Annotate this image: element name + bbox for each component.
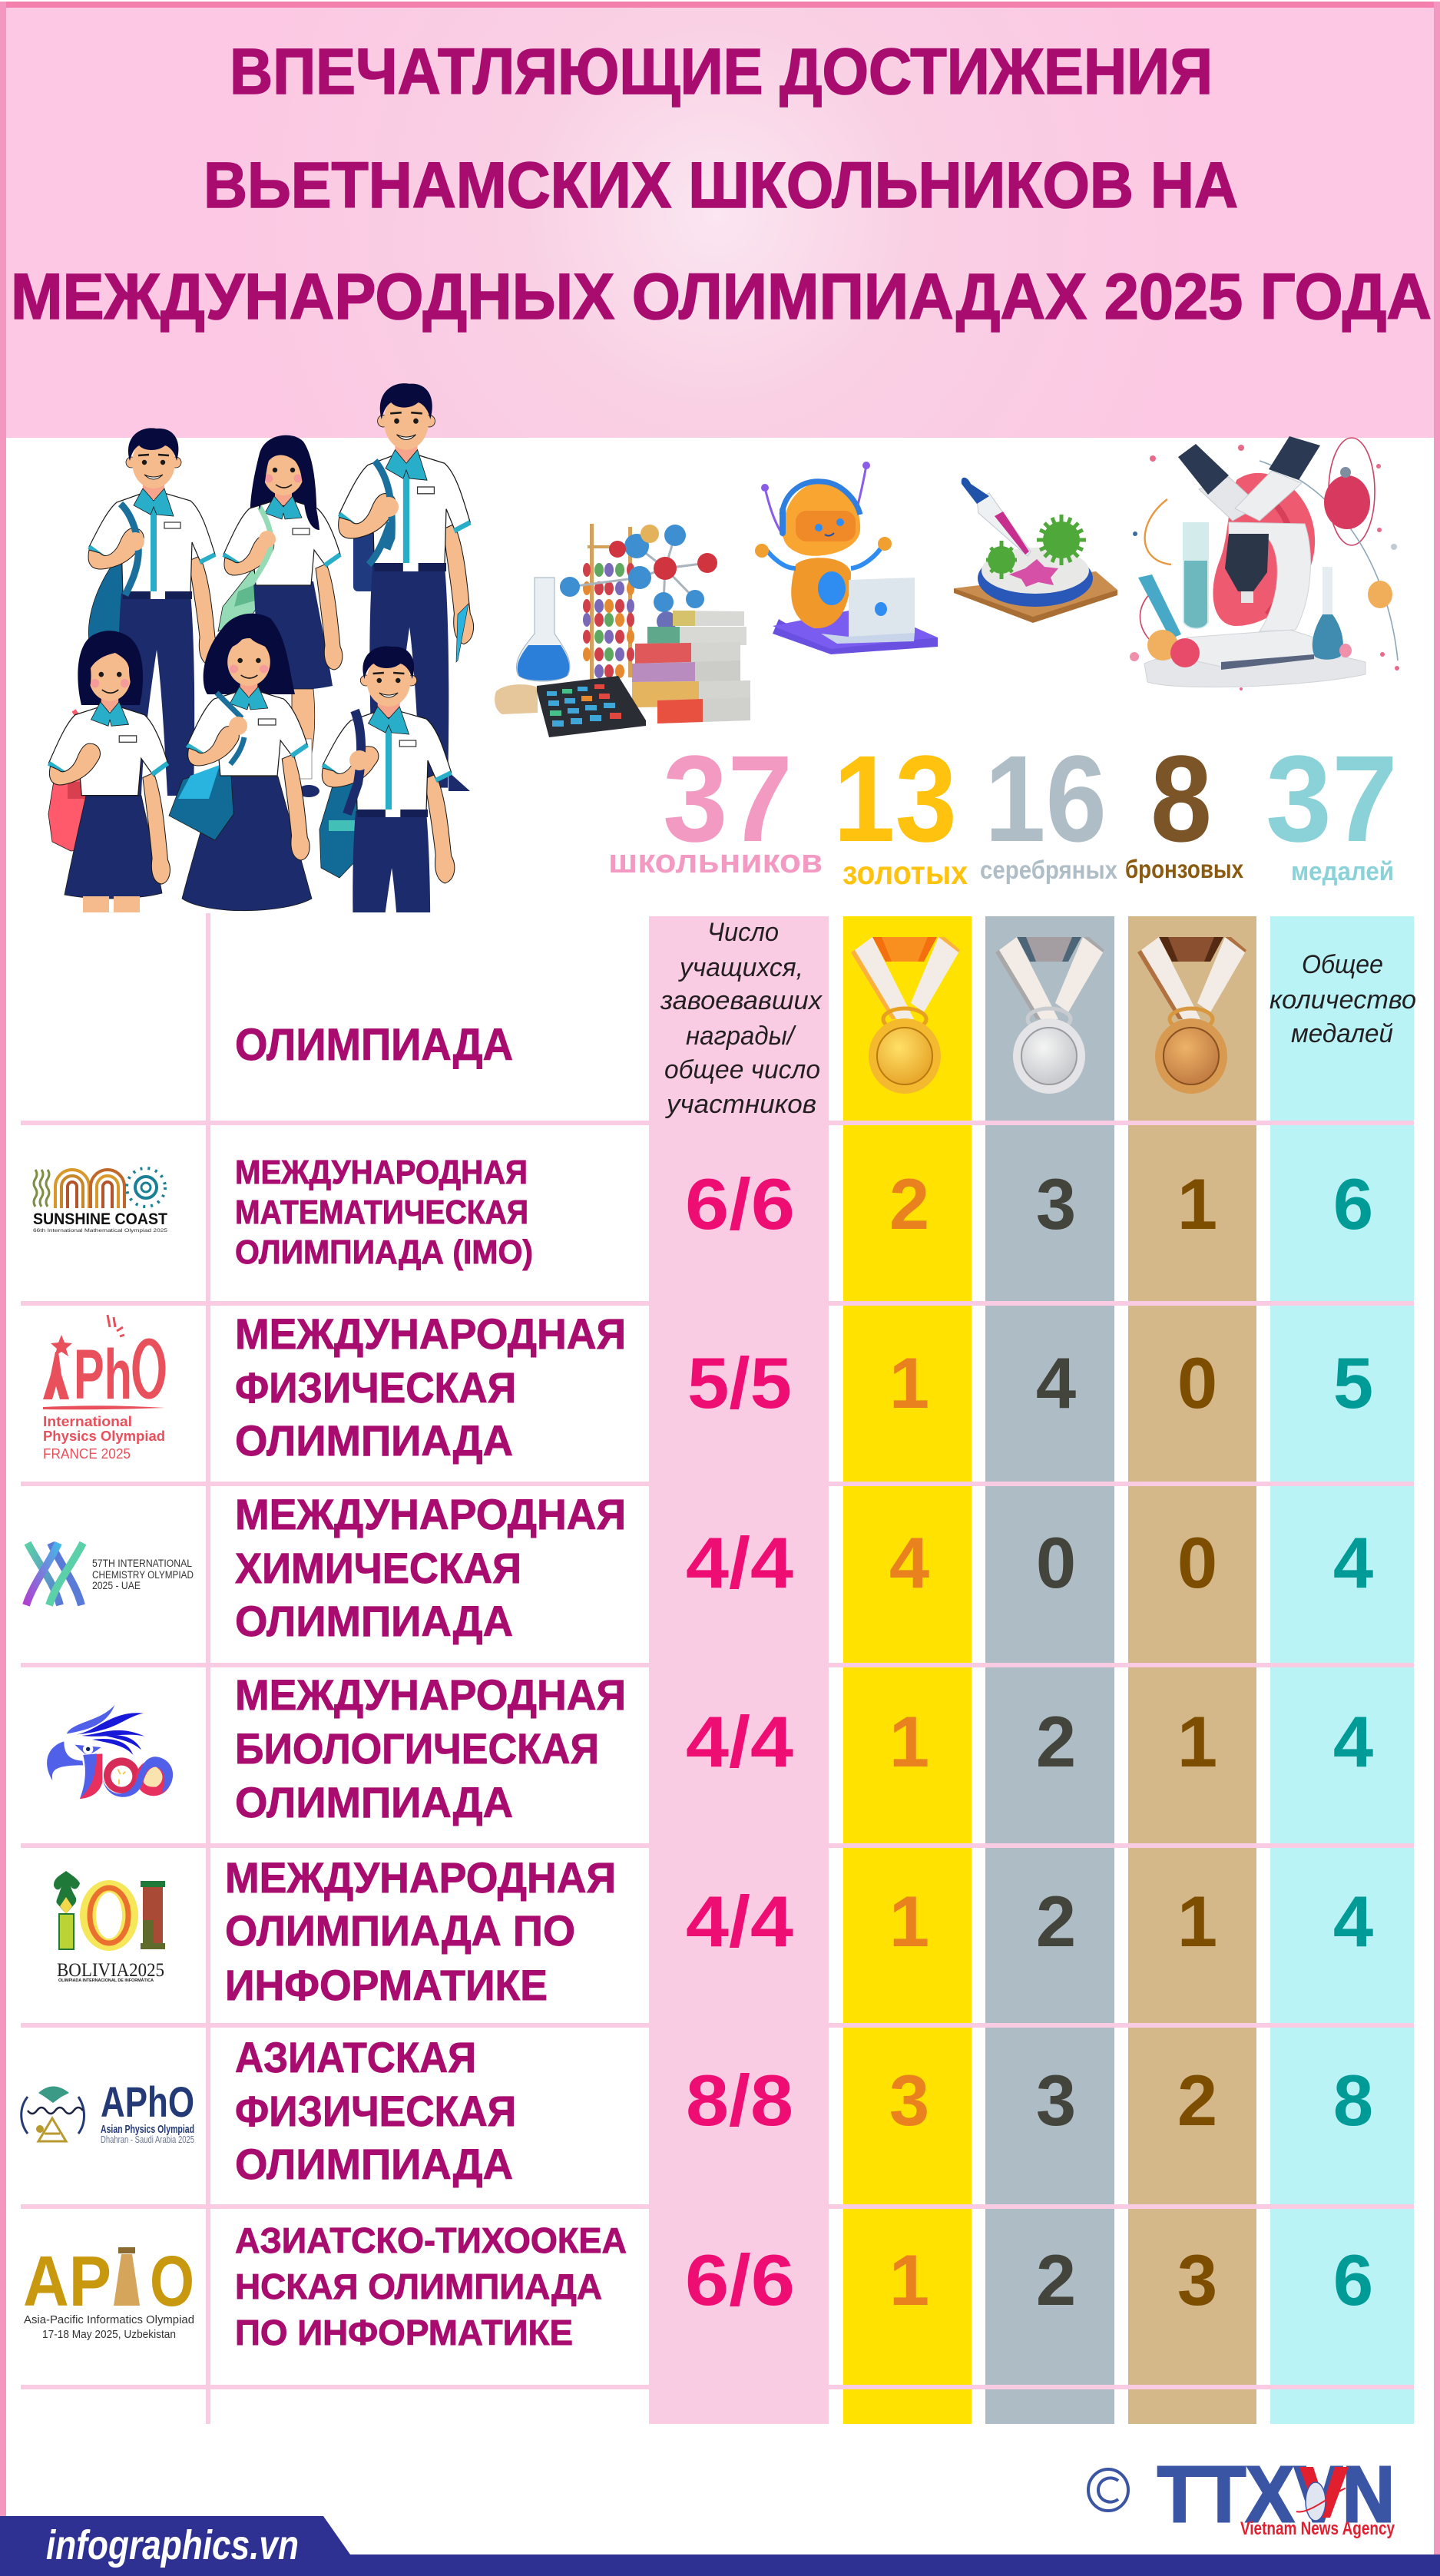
logo: copyright and TTXVN Vietnam News Agency: Vietnam News Agency bbox=[1240, 2518, 1395, 2539]
logo: IChO UAE 2025: CHEMISTRY OLYMPIAD bbox=[92, 1569, 194, 1581]
values bbox=[686, 1881, 1373, 1962]
olympiad name bbox=[235, 2033, 516, 2188]
tall tube bbox=[1183, 522, 1209, 629]
olympiad name: ОЛИМПИАДА bbox=[235, 1597, 513, 1645]
values bbox=[685, 1164, 1373, 1244]
olympiad name: НСКАЯ ОЛИМПИАДА bbox=[235, 2266, 602, 2306]
illustration: robot with laptop bbox=[755, 462, 938, 654]
stat: silver medals: серебряных bbox=[980, 856, 1118, 884]
values bbox=[686, 1522, 1373, 1603]
header: awarded students over participants: завоевавших bbox=[660, 986, 823, 1015]
title: МЕЖДУНАРОДНЫХ ОЛИМПИАДАХ 2025 ГОДА bbox=[11, 260, 1432, 333]
logo: IOI Bolivia 2025: OLIMPIADA INTERNACIONAL DE INFORMÁTICA bbox=[58, 1978, 154, 1983]
header: awarded students over participants: награды/ bbox=[686, 1021, 796, 1051]
olympiad name: ИНФОРМАТИКЕ bbox=[225, 1961, 548, 2009]
row 2: physics bbox=[43, 1310, 1373, 1465]
row 6: Asian physics bbox=[22, 2033, 1373, 2188]
logo: IMO Sunshine Coast: 66th International Mathematical Olympiad 2025 bbox=[33, 1228, 167, 1233]
stat: bronze medals bbox=[1125, 730, 1244, 883]
student: boy back right bbox=[339, 383, 474, 791]
values: 2 bbox=[1036, 1881, 1076, 1962]
olympiad name bbox=[235, 2220, 627, 2353]
copyright symbol bbox=[1088, 2469, 1128, 2511]
microscope arm bbox=[1229, 522, 1310, 631]
values: 4/4 bbox=[686, 1881, 793, 1962]
calculator bbox=[537, 676, 646, 737]
title band bbox=[0, 2, 1440, 438]
olympiad name bbox=[235, 1310, 626, 1465]
stat: total medals: медалей bbox=[1291, 857, 1394, 886]
values: 4 bbox=[1333, 1701, 1373, 1782]
values: 6 bbox=[1333, 1164, 1373, 1244]
values: 4 bbox=[1036, 1343, 1076, 1423]
values: 1 bbox=[889, 1881, 929, 1962]
values: 6/6 bbox=[685, 2240, 795, 2320]
header: awarded students over participants: участников bbox=[665, 1090, 816, 1119]
values: 3 bbox=[1036, 1164, 1076, 1244]
values: 6 bbox=[1333, 2240, 1373, 2320]
olympiad name: ФИЗИЧЕСКАЯ bbox=[235, 2087, 516, 2135]
illustration: six students in uniform bbox=[48, 383, 475, 912]
eyepieces and tubes bbox=[1199, 477, 1260, 521]
logo: IPhO France 2025: Physics Olympiad bbox=[43, 1429, 165, 1444]
student: girl front middle bbox=[169, 614, 312, 911]
header: awarded students over participants: Число bbox=[707, 918, 779, 947]
logo: IMO Sunshine Coast: SUNSHINE COAST bbox=[33, 1210, 167, 1228]
values: 8/8 bbox=[686, 2060, 793, 2141]
icon: silver medal bbox=[995, 937, 1104, 1094]
olympiad name: МАТЕМАТИЧЕСКАЯ bbox=[235, 1194, 528, 1231]
values bbox=[686, 2060, 1373, 2141]
right flask bbox=[1313, 567, 1343, 660]
values: 1 bbox=[1177, 1881, 1217, 1962]
values: 2 bbox=[1036, 2240, 1076, 2320]
values: 5/5 bbox=[687, 1343, 792, 1423]
title bbox=[11, 35, 1432, 333]
olympiad name: ОЛИМПИАДА bbox=[235, 1416, 513, 1465]
stat: silver medals: 16 bbox=[985, 730, 1107, 867]
header: awarded students over participants: учащихся, bbox=[678, 953, 803, 982]
logo: IPhO France 2025: Ph bbox=[74, 1336, 132, 1414]
values: 8 bbox=[1333, 2060, 1373, 2141]
values: 3 bbox=[1177, 2240, 1217, 2320]
values: 4 bbox=[1333, 1881, 1373, 1962]
title: ВЬЕТНАМСКИХ ШКОЛЬНИКОВ НА bbox=[204, 149, 1238, 221]
header: awarded students over participants: общее число bbox=[664, 1055, 820, 1084]
stat: total students: школьников bbox=[608, 843, 823, 880]
olympiad name: МЕЖДУНАРОДНАЯ bbox=[235, 1154, 528, 1191]
olympiad name: ОЛИМПИАДА bbox=[235, 2140, 513, 2188]
student: boy back left bbox=[88, 428, 218, 796]
values: 2 bbox=[1177, 2060, 1217, 2141]
values bbox=[687, 1343, 1373, 1423]
values: 3 bbox=[889, 2060, 929, 2141]
olympiad name: МЕЖДУНАРОДНАЯ bbox=[235, 1490, 626, 1538]
logo: IMO Sunshine Coast bbox=[33, 1168, 167, 1233]
logo: IOI Bolivia 2025: BOLIVIA2025 bbox=[57, 1960, 164, 1981]
flask bbox=[516, 578, 570, 681]
illustration: petri dish with viruses and dropper bbox=[954, 478, 1117, 623]
olympiad name: ОЛИМПИАДА bbox=[235, 1778, 513, 1826]
stat: total medals: 37 bbox=[1266, 730, 1398, 867]
values: 2 bbox=[889, 1164, 929, 1244]
values: 2 bbox=[1036, 1701, 1076, 1782]
logo: IPhO France 2025: FRANCE 2025 bbox=[43, 1446, 131, 1462]
student: girl front left bbox=[48, 631, 170, 913]
values bbox=[685, 2240, 1373, 2320]
logo: APIO Uzbekistan 2025 bbox=[23, 2241, 194, 2341]
header: total medals: Общее bbox=[1302, 950, 1383, 979]
stat: gold medals: золотых bbox=[842, 855, 968, 892]
values: 4 bbox=[1333, 1522, 1373, 1603]
values: 4/4 bbox=[686, 1522, 793, 1603]
olympiad name: ОЛИМПИАДА ПО bbox=[225, 1906, 575, 1955]
olympiad name: МЕЖДУНАРОДНАЯ bbox=[225, 1853, 616, 1902]
table grid lines bbox=[21, 913, 1414, 2424]
header: total medals: медалей bbox=[1291, 1019, 1393, 1048]
header: olympiad column: ОЛИМПИАДА bbox=[235, 1020, 513, 1070]
olympiad name: ОЛИМПИАДА (IMO) bbox=[235, 1233, 533, 1271]
row 4: biology bbox=[47, 1670, 1373, 1826]
coloured spheres bbox=[1147, 630, 1178, 661]
olympiad name: БИОЛОГИЧЕСКАЯ bbox=[235, 1724, 599, 1773]
stack of books bbox=[632, 611, 750, 723]
logo: APhO Saudi Arabia 2025: Dhahran - Saudi Arabia 2025 bbox=[101, 2134, 194, 2145]
footer bar bbox=[0, 2516, 1440, 2576]
title: ВПЕЧАТЛЯЮЩИЕ ДОСТИЖЕНИЯ bbox=[230, 35, 1213, 108]
logo: APIO Uzbekistan 2025: Asia-Pacific Informatics Olympiad bbox=[24, 2313, 194, 2326]
olympiad name bbox=[235, 1670, 626, 1826]
values: 1 bbox=[1177, 1701, 1217, 1782]
wood block bbox=[495, 684, 538, 714]
icon: bronze medal bbox=[1137, 937, 1246, 1094]
olympiad name: ПО ИНФОРМАТИКЕ bbox=[235, 2313, 573, 2353]
logo: IChO UAE 2025: 2025 - UAE bbox=[92, 1580, 141, 1591]
olympiad name bbox=[235, 1154, 533, 1271]
icon: gold medal bbox=[851, 937, 960, 1094]
row 1: IMO bbox=[33, 1154, 1373, 1271]
olympiad name: МЕЖДУНАРОДНАЯ bbox=[235, 1310, 626, 1358]
row 5: informatics bbox=[54, 1853, 1373, 2009]
values: 1 bbox=[889, 2240, 929, 2320]
olympiad name bbox=[225, 1853, 616, 2009]
row 3: chemistry bbox=[26, 1490, 1373, 1645]
logo: APhO Saudi Arabia 2025: Asian Physics Olympiad bbox=[101, 2123, 194, 2136]
olympiad name: АЗИАТСКАЯ bbox=[235, 2033, 476, 2081]
values: 5 bbox=[1333, 1343, 1373, 1423]
illustration: microscope with flasks and orbits bbox=[1130, 436, 1399, 690]
student: boy front right bbox=[319, 646, 455, 912]
logo: IChO UAE 2025 bbox=[26, 1543, 194, 1605]
olympiad name: ФИЗИЧЕСКАЯ bbox=[235, 1363, 516, 1412]
student: girl back middle bbox=[218, 435, 343, 797]
logo: IBO eagle bbox=[47, 1705, 173, 1799]
values: 1 bbox=[889, 1343, 929, 1423]
header: total medals: количество bbox=[1270, 985, 1416, 1015]
olympiad name: МЕЖДУНАРОДНАЯ bbox=[235, 1670, 626, 1719]
olympiad name: АЗИАТСКО-ТИХООКЕА bbox=[235, 2220, 627, 2260]
values: 1 bbox=[1177, 1164, 1217, 1244]
microscope base bbox=[1144, 650, 1366, 687]
illustration: lab kit, abacus, molecule and books bbox=[495, 524, 750, 737]
logo: IChO UAE 2025: 57TH INTERNATIONAL bbox=[92, 1558, 192, 1569]
objective lenses bbox=[1225, 534, 1269, 591]
olympiad name: ХИМИЧЕСКАЯ bbox=[235, 1544, 521, 1592]
stat: total students: 37 bbox=[663, 730, 793, 867]
red swirl bbox=[1213, 473, 1315, 626]
logo: IPhO France 2025: International bbox=[43, 1414, 132, 1429]
values: 6/6 bbox=[685, 1164, 795, 1244]
values: 0 bbox=[1177, 1522, 1217, 1603]
stat: gold medals: 13 bbox=[833, 730, 957, 867]
slanted tube bbox=[1138, 574, 1181, 639]
values: 4/4 bbox=[686, 1701, 793, 1782]
values bbox=[686, 1701, 1373, 1782]
table column backgrounds bbox=[649, 916, 1414, 2424]
orbit lines bbox=[1140, 438, 1398, 661]
logo: APhO Saudi Arabia 2025: APhO bbox=[101, 2078, 194, 2126]
values: 3 bbox=[1036, 2060, 1076, 2141]
logo: copyright and TTXVN Vietnam News Agency: TTXVN bbox=[1157, 2450, 1395, 2538]
logo: APIO Uzbekistan 2025: O bbox=[150, 2241, 194, 2321]
footer site name: infographics.vn bbox=[46, 2522, 299, 2568]
logo: IPhO France 2025 bbox=[43, 1315, 165, 1462]
abacus bbox=[583, 524, 634, 680]
values: 0 bbox=[1177, 1343, 1217, 1423]
header: total medals bbox=[1270, 950, 1416, 1048]
values: 0 bbox=[1036, 1522, 1076, 1603]
header: awarded students over participants bbox=[660, 918, 823, 1119]
stat: bronze medals: бронзовых bbox=[1125, 855, 1244, 883]
stat: total students bbox=[608, 730, 823, 880]
molecule bbox=[560, 525, 717, 631]
row 7: Asia-Pacific informatics bbox=[23, 2220, 1373, 2353]
logo: APhO Saudi Arabia 2025 bbox=[22, 2078, 194, 2145]
stat: bronze medals: 8 bbox=[1150, 730, 1212, 867]
values: 4 bbox=[889, 1522, 929, 1603]
values: 1 bbox=[889, 1701, 929, 1782]
logo: APIO Uzbekistan 2025: AP bbox=[23, 2241, 111, 2321]
logo: APIO Uzbekistan 2025: 17-18 May 2025, Uzbekistan bbox=[42, 2328, 176, 2341]
olympiad name bbox=[235, 1490, 626, 1645]
logo: IOI Bolivia 2025 bbox=[54, 1871, 165, 1983]
